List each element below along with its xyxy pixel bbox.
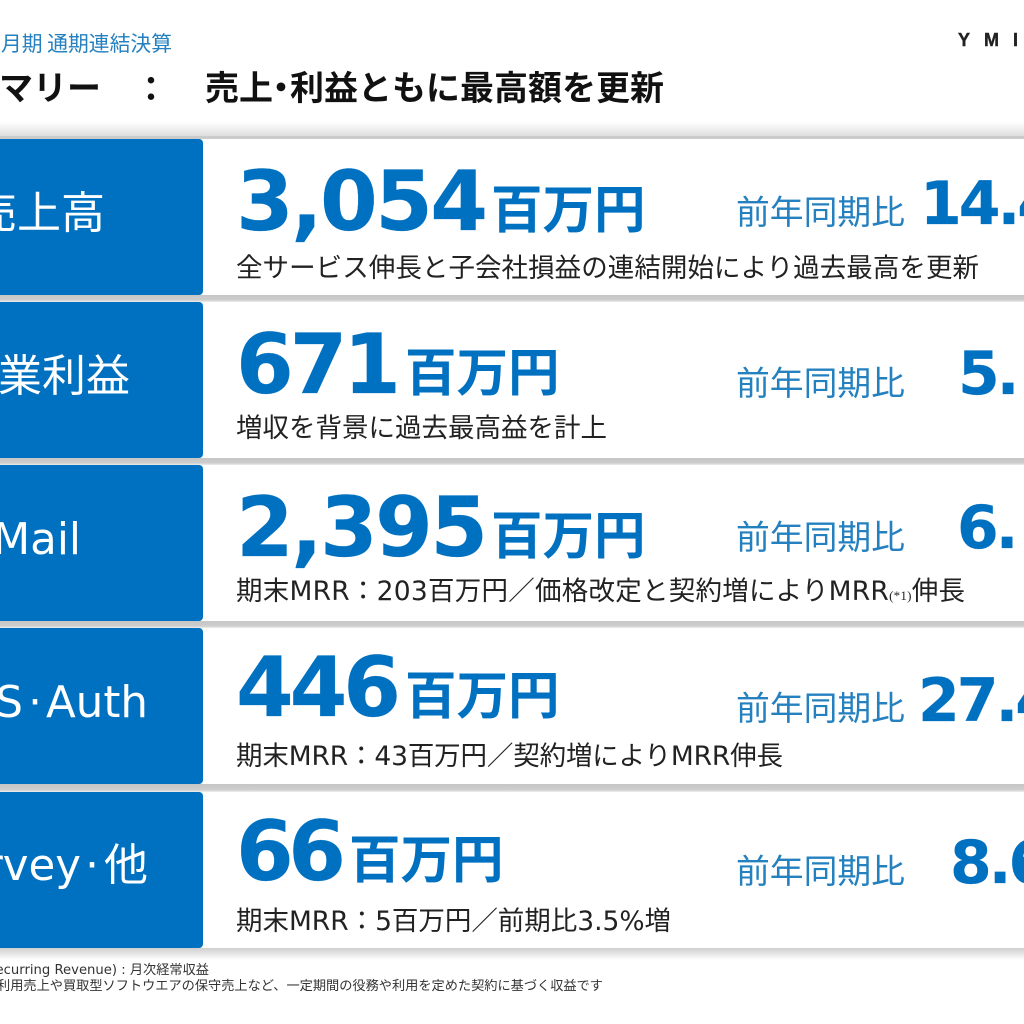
year-on-year: 6.: 6. bbox=[957, 493, 1016, 563]
label tab: S・Auth bbox=[0, 628, 203, 784]
value: 3,054百万円: 百万円 bbox=[491, 168, 646, 243]
label tab: Survey・他: 他 bbox=[104, 829, 148, 893]
title: ・ bbox=[264, 61, 298, 110]
value: 3,054百万円: 3,054 bbox=[236, 153, 488, 250]
panel: Mail bbox=[0, 465, 1016, 621]
note: 全サービス伸長と子会社損益の連結開始により過去最高を更新 bbox=[236, 253, 979, 284]
note: 期末MRR：203百万円／価格改定と契約増によりMRR(*1)伸長 bbox=[236, 576, 965, 607]
year-on-year: 8.6: 前年同期比 bbox=[736, 844, 905, 893]
value: 66百万円: 百万円 bbox=[349, 818, 504, 893]
note: 増収を背景に過去最高益を計上 bbox=[236, 413, 607, 444]
label tab: 売上高 bbox=[0, 139, 203, 295]
value: 2,395百万円: 2,395 bbox=[236, 479, 488, 576]
year-on-year: 5.: 前年同期比 bbox=[736, 356, 905, 405]
year-on-year: 5.: 5. bbox=[958, 339, 1017, 409]
year-on-year: 8.6 bbox=[736, 828, 1024, 898]
panel: 売上高 bbox=[0, 139, 1024, 295]
value: 3,054百万円 bbox=[236, 153, 646, 250]
label tab: Survey・他 bbox=[0, 792, 203, 948]
label tab: 営業利益 bbox=[0, 302, 203, 458]
value: 66百万円: 66 bbox=[236, 803, 346, 900]
note: 期末MRR：43百万円／契約増によりMRR伸長 bbox=[236, 741, 783, 772]
value: 2,395百万円 bbox=[236, 479, 646, 576]
value: 446百万円: 百万円 bbox=[405, 654, 560, 729]
title: 売上 bbox=[205, 61, 273, 110]
year-on-year: 27.4: 前年同期比 bbox=[736, 681, 905, 730]
footnotes bbox=[0, 962, 603, 994]
value: 446百万円 bbox=[236, 639, 560, 736]
label tab: S・Auth: · bbox=[28, 678, 42, 728]
year-on-year: 14.4 bbox=[736, 169, 1024, 239]
panel: SMS・Auth bbox=[0, 628, 1024, 784]
label tab: Survey・他: · bbox=[85, 841, 99, 891]
year-on-year: 6.: 前年同期比 bbox=[736, 510, 905, 559]
value: 671百万円: 百万円 bbox=[405, 331, 560, 406]
title bbox=[0, 61, 664, 111]
value: 671百万円 bbox=[236, 316, 560, 413]
label tab: S・Auth: Auth bbox=[46, 678, 148, 728]
value: 446百万円: 446 bbox=[236, 639, 401, 736]
year-on-year: 14.4: 前年同期比 bbox=[736, 185, 905, 234]
year-on-year: 5. bbox=[736, 339, 1017, 409]
label tab: Mail bbox=[0, 465, 203, 621]
title: 利益ともに最高額を更新 bbox=[290, 61, 664, 110]
note: 期末MRR：5百万円／前期比3.5%増 bbox=[236, 906, 671, 937]
panel: Survey・他 bbox=[0, 792, 1024, 948]
value: 66百万円 bbox=[236, 803, 504, 900]
year-on-year: 6. bbox=[736, 493, 1016, 563]
value: 671百万円: 671 bbox=[236, 316, 401, 413]
value: 2,395百万円: 百万円 bbox=[491, 494, 646, 569]
title: ： bbox=[134, 62, 168, 111]
footnotes: 利用売上や買取型ソフトウエアの保守売上など、一定期間の役務や利用を定めた契約に基づく収益です bbox=[0, 978, 603, 994]
panel: 営業利益 bbox=[0, 302, 1017, 458]
year-on-year: 27.4 bbox=[736, 666, 1024, 736]
